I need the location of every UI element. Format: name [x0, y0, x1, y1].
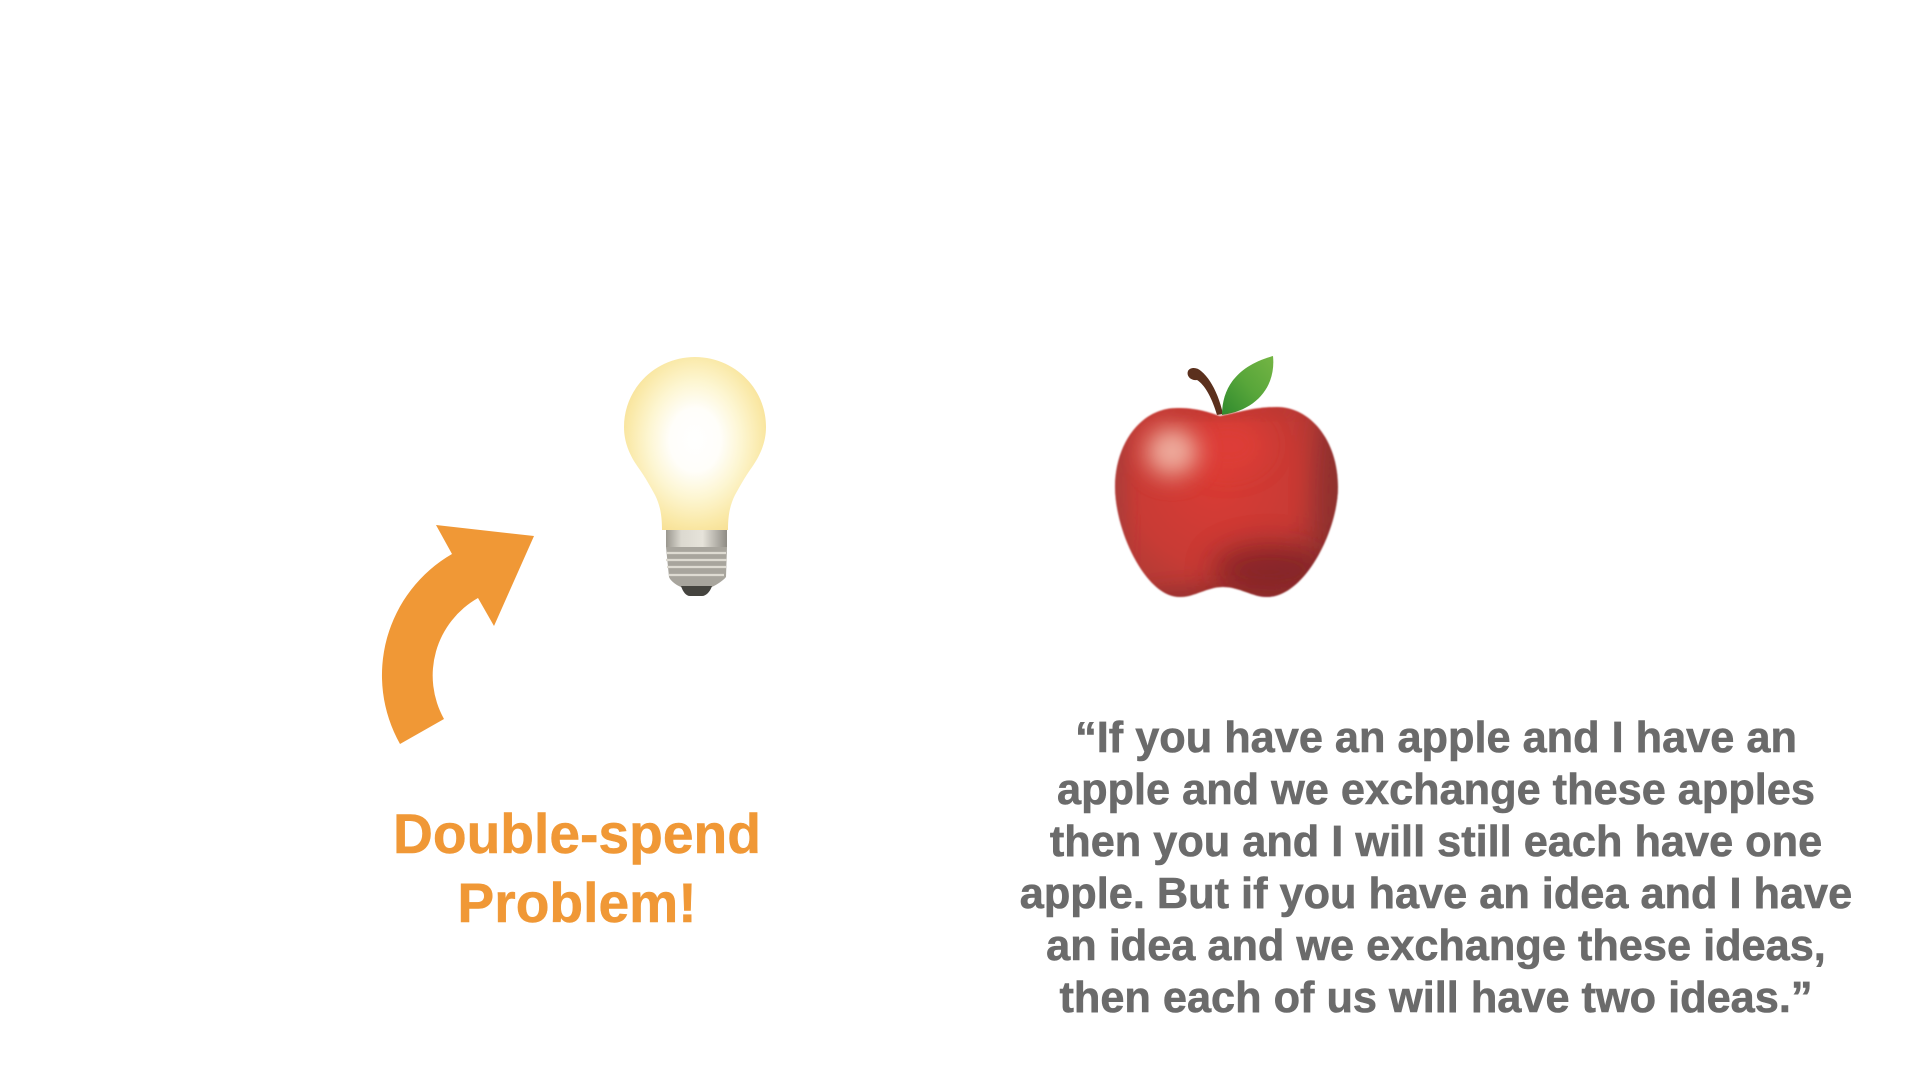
heading: Double-spend Problem!: Problem! [457, 872, 697, 934]
quote text: “If you have an apple and I have an [1075, 714, 1797, 762]
quote text: apple. But if you have an idea and I have [1020, 870, 1852, 918]
icon: light bulb [624, 357, 766, 596]
quote text: apple and we exchange these apples [1057, 766, 1815, 814]
apple body [1114, 406, 1340, 598]
bulb screw base [666, 530, 727, 596]
quote text: then you and I will still each have one [1050, 818, 1822, 866]
heading: Double-spend Problem!: Double-spend [393, 803, 761, 865]
arrow: curved orange arrow pointing to light bulb [382, 525, 534, 744]
quote text: an idea and we exchange these ideas, [1046, 922, 1826, 970]
apple leaf [1222, 356, 1273, 415]
quote text: then each of us will have two ideas.” [1059, 974, 1813, 1022]
apple stem [1188, 368, 1223, 415]
icon: red apple [1114, 356, 1340, 598]
bulb glass [624, 357, 766, 530]
